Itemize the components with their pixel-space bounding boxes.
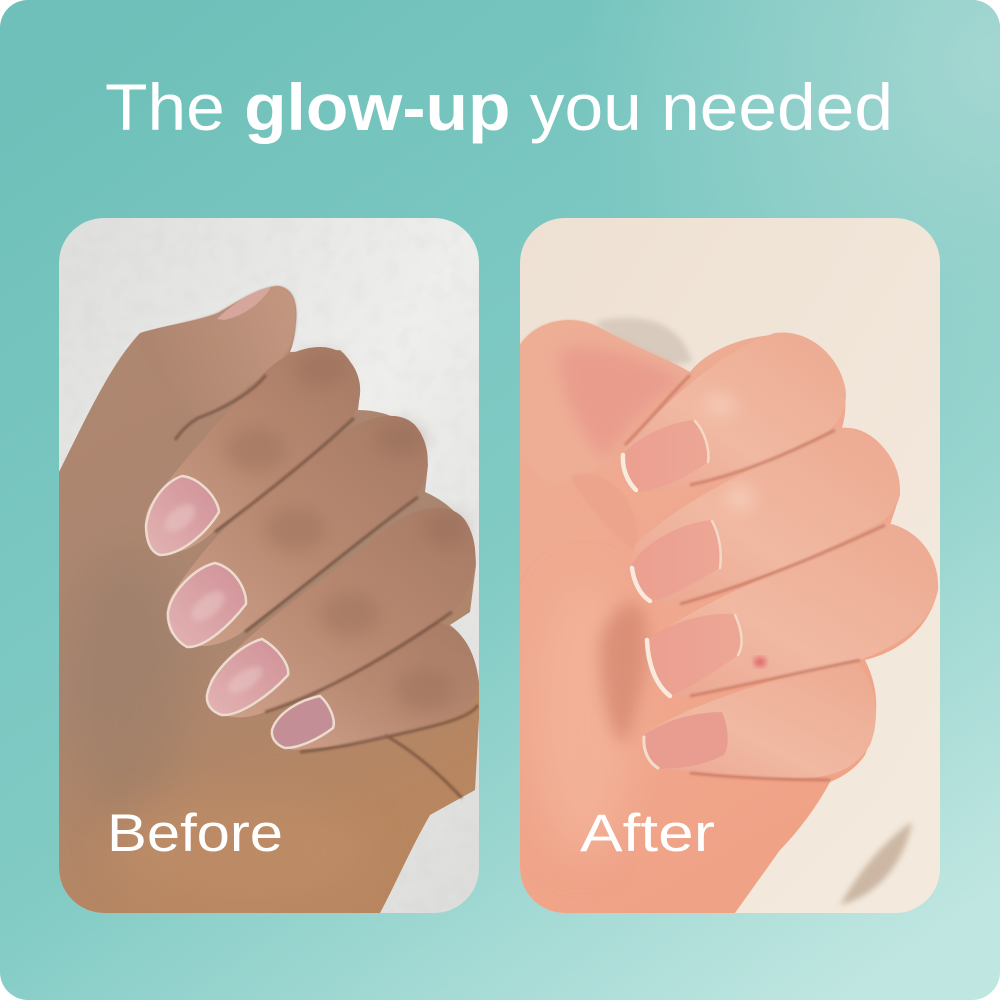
finger 2 (630, 428, 900, 603)
finger 4 (272, 622, 478, 750)
nail tips (623, 455, 670, 768)
finger 4 (646, 660, 876, 778)
highlights (704, 395, 754, 510)
finger 2 (167, 416, 428, 646)
palm shadow (600, 603, 646, 745)
nails (622, 420, 742, 769)
wall shadows (595, 318, 940, 913)
nails (146, 476, 334, 748)
nail highlights (165, 504, 262, 694)
thumb (520, 319, 661, 358)
label: after: After (580, 804, 715, 863)
finger 3 (207, 508, 475, 717)
title: The glow-up you needed (105, 70, 893, 144)
knuckle texture (225, 352, 467, 712)
panel: after photo (520, 218, 940, 913)
finger creases (625, 375, 885, 780)
finger 3 (648, 522, 938, 698)
finger creases (175, 375, 478, 798)
nail cuticle edges (695, 421, 742, 655)
thumb (165, 284, 298, 400)
redness spots (754, 657, 766, 667)
panel: before photo (59, 218, 480, 913)
palm shading (87, 580, 167, 792)
finger 1 (145, 347, 360, 553)
hand: after (520, 320, 938, 913)
label: before: Before (107, 804, 283, 863)
finger 1 (637, 332, 846, 482)
hand: before (59, 286, 480, 913)
